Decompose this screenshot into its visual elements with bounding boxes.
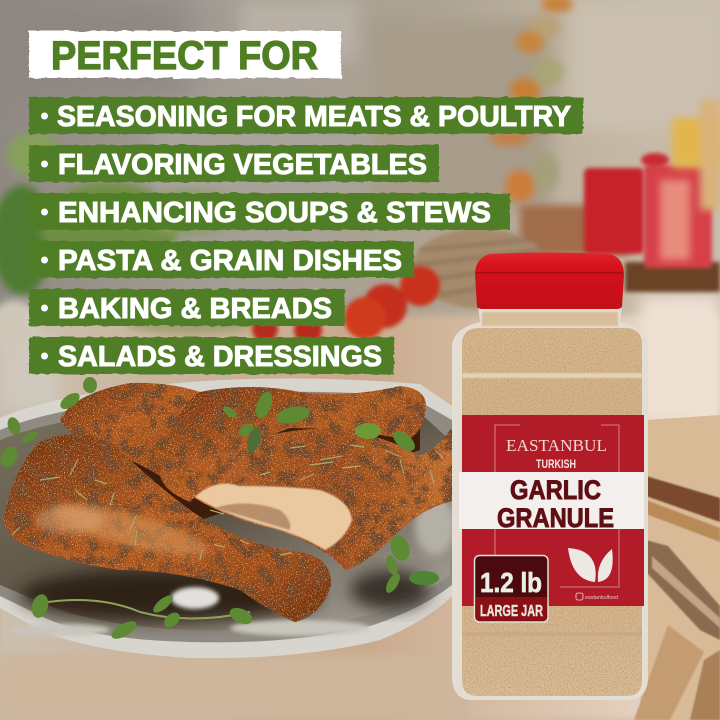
jar: red screw cap: [475, 252, 624, 309]
chicken: glossy highlight on drumstick: [49, 494, 211, 566]
herb: bottom thyme sprig: [29, 592, 255, 642]
list item: salads and dressings: SALADS & DRESSINGS: [58, 341, 382, 373]
jar: leaf icon: [568, 548, 613, 582]
herb: right thigh leaves: [355, 423, 418, 455]
chicken: back middle piece: [160, 386, 426, 502]
blurred rope ball: [412, 228, 548, 308]
heading: perfect for: PERFECT FOR: [51, 34, 318, 78]
jar: white name band: [459, 472, 644, 529]
blurred orange vegetables on shelf: [490, 0, 573, 202]
fresh herb sprigs: [0, 377, 439, 642]
jar: granule contents: [462, 318, 642, 698]
blurred tomatoes: [252, 266, 440, 344]
list item: baking and breads: BAKING & BREADS: [58, 293, 332, 325]
blurred red candles: [584, 100, 720, 268]
list item: enhancing soups and stews: ENHANCING SOUPS & STEWS: [58, 197, 491, 229]
herb: top center sprig: [221, 389, 311, 454]
list item: seasoning for meats and poultry: SEASONING FOR MEATS & POULTRY: [57, 101, 571, 133]
chicken: dark backing between pieces: [70, 395, 420, 520]
chicken: pale exposed meat: [195, 484, 352, 550]
jar: size badge: [474, 556, 548, 622]
jar of garlic granule: [452, 252, 648, 700]
badge: large jar: LARGE JAR: [480, 603, 543, 620]
jar: instagram handle: [576, 593, 618, 601]
jar: label frame lines: [495, 425, 619, 587]
herb: upper left leaves: [0, 377, 97, 471]
silver plate: [0, 378, 458, 658]
jar: red label panel: [462, 415, 644, 606]
jar: transparent body: [452, 306, 648, 700]
badge: weight: 1.2 lb: [480, 567, 542, 598]
jar: granule title: GRANULE: [497, 503, 614, 533]
jar: turkish label: TURKISH: [536, 457, 576, 471]
list item: flavoring vegetables: FLAVORING VEGETABLES: [58, 149, 427, 181]
jar: brand name: EASTANBUL: [506, 436, 607, 455]
list item: pasta and grain dishes: PASTA & GRAIN DISHES: [58, 245, 402, 277]
right side linen cloth and wood handles: [634, 415, 720, 720]
chicken: rosemary flecks: [12, 445, 443, 560]
jar: instagram handle: eastanbulfood: [585, 595, 618, 601]
blurred herbs at left: [0, 133, 255, 350]
chicken: front drumstick: [3, 434, 331, 622]
herb: right plate sprig: [383, 533, 439, 595]
chicken: right thigh: [193, 418, 458, 570]
roasted chicken: [3, 383, 458, 622]
jar: garlic title: GARLIC: [510, 475, 601, 505]
chicken: back left thigh: [60, 383, 200, 476]
